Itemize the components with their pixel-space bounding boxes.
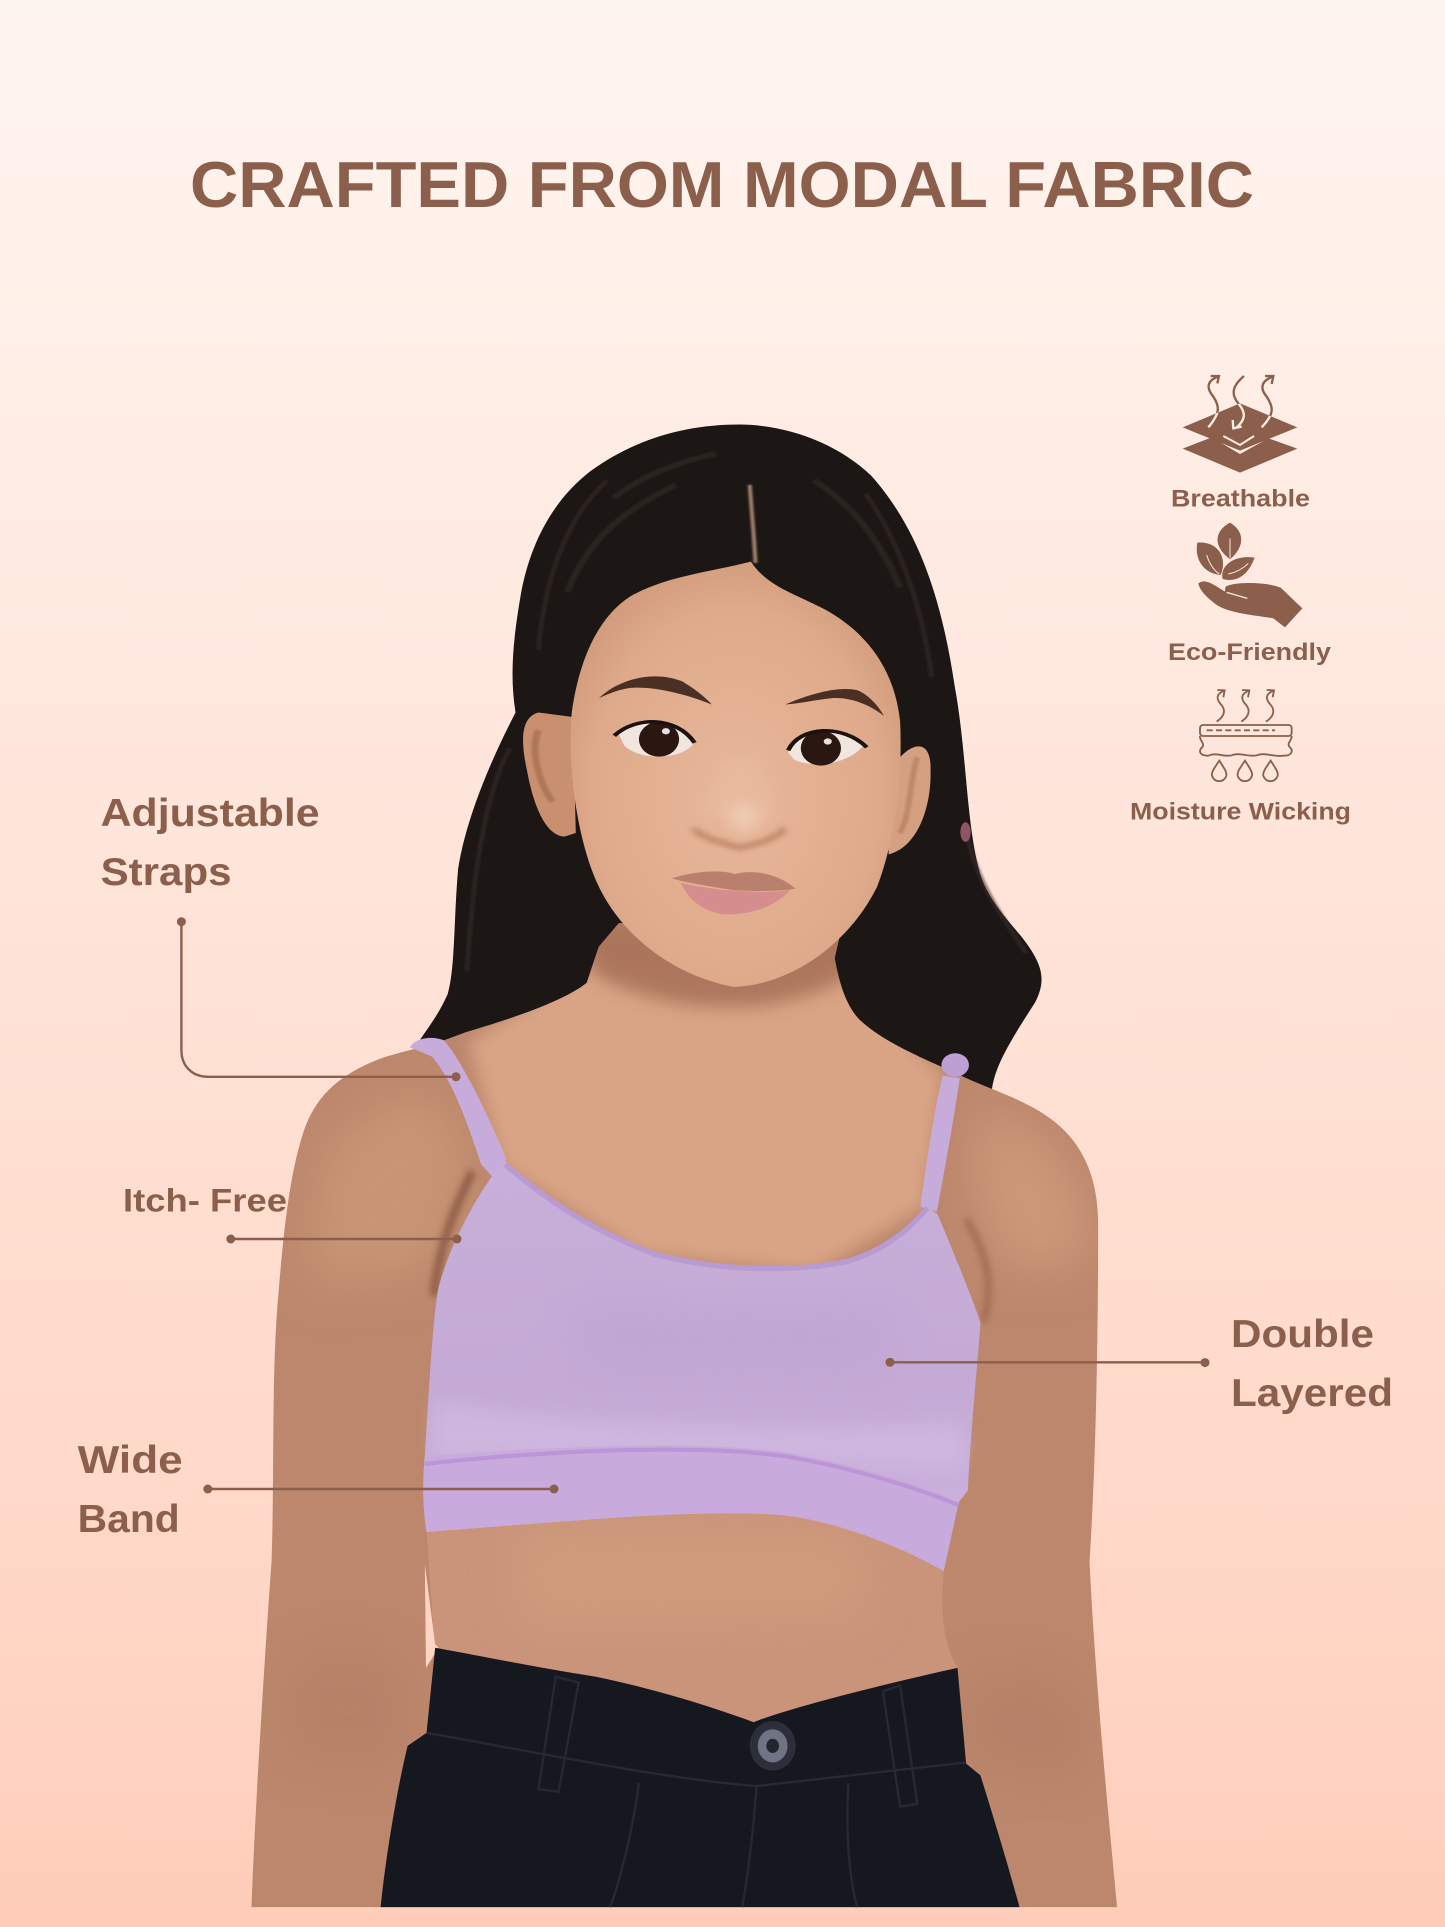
chest	[470, 965, 943, 1272]
body skin	[251, 923, 1117, 1907]
lips	[672, 872, 796, 914]
icon: moisture wicking fabric	[1200, 690, 1292, 781]
photo: girl wearing lilac bralette	[251, 425, 1117, 1907]
bra body	[423, 1161, 980, 1571]
face shape	[571, 562, 901, 987]
label: adjustable straps: Straps	[101, 851, 232, 894]
left eye	[614, 722, 695, 757]
left strap	[410, 1038, 506, 1180]
leader line: adjustable straps	[177, 917, 460, 1081]
title: CRAFTED FROM MODAL FABRIC	[190, 148, 1254, 221]
callout: double layered	[886, 1313, 1393, 1415]
leader line: double layered	[886, 1358, 1210, 1367]
hair tie	[960, 822, 971, 842]
label: double layered	[1231, 1313, 1393, 1415]
neckline trim	[505, 1164, 928, 1269]
label: wide band	[78, 1439, 183, 1541]
left ear	[523, 712, 576, 837]
neck and face	[523, 485, 971, 987]
strap adjuster	[941, 1053, 969, 1077]
hem band	[423, 1446, 959, 1571]
label: double layered: Layered	[1231, 1372, 1393, 1415]
label: breathable: Breathable	[1171, 486, 1310, 513]
label: wide band: Wide	[78, 1439, 183, 1482]
right eyebrow	[785, 689, 884, 716]
pants details	[427, 1677, 966, 1907]
right eye	[788, 731, 867, 766]
lower arm tones	[286, 1653, 406, 1762]
label: double layered: Double	[1231, 1313, 1374, 1356]
label: adjustable straps	[101, 792, 320, 894]
right strap	[920, 1076, 960, 1212]
label: eco-friendly: Eco-Friendly	[1168, 639, 1332, 666]
leader line: wide band	[203, 1484, 559, 1494]
label: moisture wicking: Moisture Wicking	[1130, 798, 1351, 825]
feature list	[1130, 376, 1351, 825]
right ear	[889, 746, 931, 854]
button	[750, 1721, 796, 1771]
pants	[381, 1648, 1019, 1907]
under-chin shadow	[584, 923, 848, 1007]
label: adjustable straps: Adjustable	[101, 792, 320, 835]
midriff	[427, 1502, 958, 1733]
label: wide band: Band	[78, 1498, 180, 1541]
fabric shade	[561, 1296, 900, 1372]
left eyebrow	[599, 676, 712, 704]
nose	[693, 756, 785, 848]
leader line: itch-free	[226, 1234, 462, 1244]
callout: adjustable straps	[101, 792, 460, 1081]
hair back	[415, 425, 1042, 1090]
underarm shadows	[434, 1171, 472, 1296]
callout: itch-free	[123, 1182, 462, 1244]
icon: leaves in hand	[1197, 523, 1302, 627]
hair part	[750, 485, 755, 563]
arm gap sliver	[425, 1564, 439, 1668]
shoulder highlights	[320, 1107, 457, 1272]
callout: wide band	[78, 1439, 558, 1541]
icon: breathable layers	[1183, 376, 1297, 473]
garments	[381, 1038, 1019, 1907]
label: itch-free: Itch- Free	[123, 1182, 287, 1218]
